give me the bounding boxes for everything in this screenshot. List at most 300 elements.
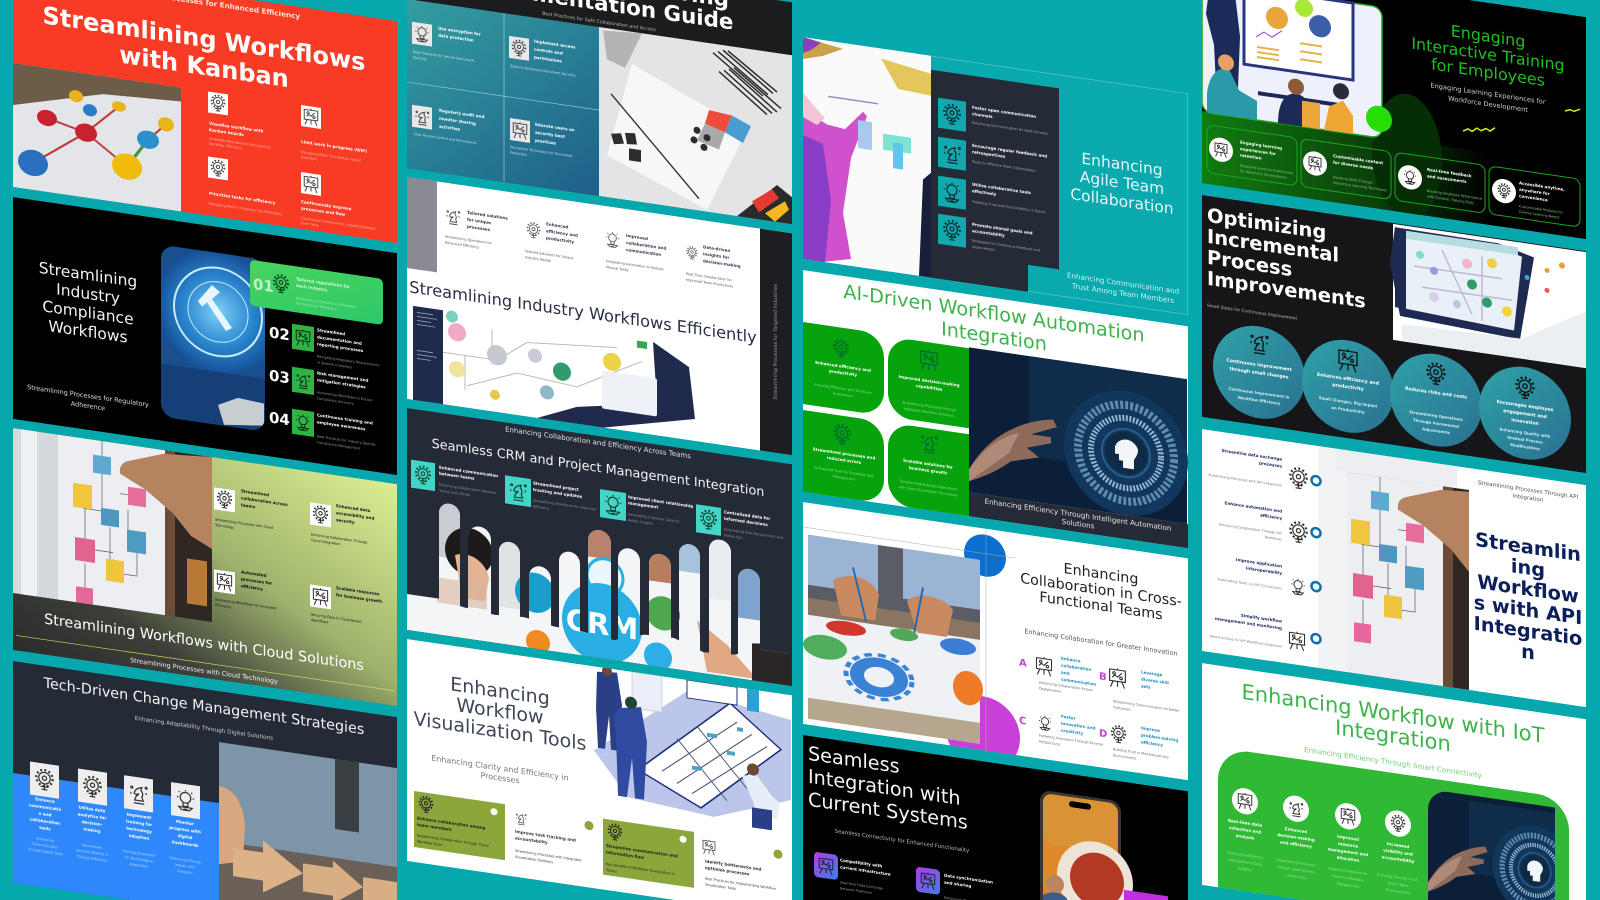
column 2: making: [84, 826, 101, 834]
tile 2: [888, 336, 969, 428]
card 3: Key Benefits of Workflow Visualization in: [606, 862, 675, 876]
card 3: and assessments: [1427, 173, 1467, 184]
item 04: [269, 405, 376, 453]
item 3: Better Insights: [628, 518, 653, 526]
squiggles: [1463, 92, 1580, 148]
card 4: Identify bottlenecks and: [705, 859, 761, 872]
item 2: Enhance automation and: [1225, 500, 1282, 514]
title: Industry: [56, 280, 120, 308]
cloud items: Enhancing Collaboration Through: [311, 533, 368, 545]
card 3: Teams: [605, 868, 617, 874]
item 2: [916, 866, 996, 900]
column 3: adoption: [129, 833, 149, 841]
kanban items: Over Time: [301, 221, 319, 228]
title: Streamlin: [1475, 528, 1581, 566]
item 3: Automating Tasks via API Connections: [1217, 577, 1282, 591]
panel: Document Sharing Implementation Guide: [407, 0, 792, 224]
item 2: [524, 218, 578, 267]
item: educate: Protection: [510, 151, 527, 157]
item B: sets: [1141, 683, 1151, 690]
column 3: [122, 775, 156, 870]
item A: collaboration: [1061, 663, 1091, 672]
item 2: [505, 475, 596, 518]
item 1: collection and: [1229, 825, 1261, 835]
column 1: n and: [39, 811, 52, 818]
item 3: [938, 176, 1046, 221]
item 2: Streamlining Processes: [1276, 858, 1316, 868]
card 2: [515, 810, 594, 870]
item 3: Generating Customer Data for: [628, 512, 679, 524]
kanban items: Continuously improve: [301, 199, 351, 211]
item 4: Promote shared goals and: [972, 222, 1033, 236]
card 01: 01: [253, 275, 274, 296]
column 4: progress with: [169, 825, 201, 834]
title: Integration: [941, 317, 1047, 356]
item 3: Improve application: [1236, 557, 1282, 569]
card 3: Streamline communication and: [606, 843, 678, 859]
subtitle: Enhancing Clarity and Efficiency in: [431, 754, 569, 783]
tile 1: [803, 322, 884, 416]
item: educate: [510, 118, 575, 164]
item B: diverse skill: [1141, 676, 1169, 685]
item 4: [938, 214, 1040, 259]
item 4: Follow-Ups: [724, 533, 742, 540]
kanban items: Kanban boards: [209, 127, 244, 137]
title column background: [1469, 468, 1586, 707]
card 4: Visualization Tools: [705, 883, 736, 891]
column 2: Data-Driven: [82, 843, 102, 850]
item: educate: Encryption Techniques for Document: [510, 145, 572, 158]
title: Process: [1207, 246, 1292, 281]
title: with Kanban: [119, 41, 289, 93]
tile 3: AI-Powered Tools for Seamless Task: [814, 466, 874, 478]
title: Enhancing: [1064, 561, 1138, 588]
item 4: decision-making: [703, 258, 741, 269]
photo: legal tech globe: [161, 246, 265, 430]
item 3: [600, 489, 693, 532]
column 4: [169, 782, 201, 876]
item 1: Enhancing Efficiency: [1227, 851, 1263, 860]
item 3: Improved: [1337, 834, 1359, 842]
card 2: Boosting Skills Through: [1333, 175, 1373, 185]
item: access controls: Implement access: [534, 39, 575, 50]
card 1: [414, 791, 505, 860]
item 2: efficiency: [1260, 512, 1282, 521]
item 4: Increased: [1387, 841, 1409, 849]
item 3: [606, 230, 666, 278]
circle 1: Continuous improvement: [1226, 359, 1292, 373]
item: encryption: Best Practices for Secure Document: [413, 50, 474, 63]
tile 3: Management: [833, 474, 856, 482]
title: Functional Teams: [1039, 590, 1163, 623]
photo: CRM arches: [407, 504, 791, 686]
item: audit: Regularly audit and: [439, 108, 484, 119]
column 4: Measuring Change: [169, 856, 201, 864]
subtitle: Streamlining Processes Through API: [1478, 480, 1578, 501]
tile 4: Transforming Business Operations: [899, 479, 957, 491]
item A: Enhancing Collaboration Across: [1039, 680, 1093, 692]
item B: B: [1099, 671, 1107, 683]
title: AI-Driven Workflow Automation: [843, 280, 1145, 347]
item 2: Efficiency: [533, 504, 549, 511]
item 3: Fostering Trust and Accountability in Teams: [972, 200, 1046, 214]
subtitle: Small Steps for Continuous Improvement: [1207, 303, 1298, 322]
cloud items: Securing Data in Cloud-Based: [311, 613, 361, 624]
item 2: Enhancing Collaboration Through API: [1219, 522, 1282, 536]
green lower band: [1202, 64, 1586, 244]
photo: team at whiteboard silhouette: [803, 37, 931, 278]
column 4: Impact with: [175, 863, 195, 870]
panel: Tech-Driven Change Management Strategies: [13, 661, 397, 900]
tile 3: Streamlined processes and: [813, 446, 875, 461]
item B: Outcomes: [1113, 705, 1130, 712]
item: access controls: Tools for Enhanced Document Security: [509, 64, 576, 78]
item A: Enhance: [1061, 656, 1080, 664]
title: for Employees: [1431, 55, 1545, 90]
tile 4: business growth: [909, 465, 947, 476]
caption band: Enhancing Efficiency Through Intelligent Automation: [985, 497, 1171, 533]
item 4: [1377, 808, 1419, 897]
cloud items: collaboration across: [241, 495, 288, 507]
item 2: and sharing: [944, 880, 971, 889]
column 3: Adaptation: [130, 862, 148, 869]
illustration: isometric planning board: [594, 664, 791, 833]
card 01: for Enhanced Efficiency: [296, 301, 336, 311]
subtitle: Enhancing Collaboration for Greater Innovation: [1024, 627, 1178, 658]
item 2: tracking and updates: [533, 487, 583, 499]
item 2: Streamlined project: [533, 480, 579, 492]
illustration: workflow map on device: [413, 305, 695, 441]
title: s with API: [1474, 591, 1582, 629]
title: Streamlining Workflows: [43, 1, 365, 76]
item 03: 03: [269, 366, 290, 387]
item 3: collaboration and: [626, 240, 666, 251]
item D: Building Trust in Multidisciplinary: [1113, 747, 1169, 759]
card 4: Diverse Learning Needs: [1519, 210, 1560, 220]
card 2: [1301, 138, 1391, 200]
title: Integratio: [1474, 612, 1582, 651]
item 2: through Smart Device: [1277, 865, 1315, 874]
card 3: [603, 819, 694, 888]
item C: [1019, 708, 1103, 753]
cloud items: accessibility and: [336, 510, 374, 521]
card 01: Tailored regulations for: [296, 276, 350, 289]
item 4: [1210, 608, 1320, 654]
column 2: decision-: [82, 819, 103, 827]
item D: D: [1099, 728, 1107, 740]
item 4: Environments: [1386, 888, 1410, 895]
decorative circles: [946, 529, 1020, 776]
item C: Foster: [1061, 714, 1076, 721]
cloud items: teams: [241, 502, 256, 509]
item: access controls: permissions: [534, 55, 562, 64]
title: Improvements: [1207, 267, 1366, 313]
card 1: for Workforce Development: [1240, 169, 1287, 180]
card 01: [250, 260, 383, 325]
circle 4: Encourages employee: [1497, 400, 1553, 413]
circle 4: engagement and: [1503, 408, 1547, 420]
column 4: digital: [178, 833, 193, 840]
item B: Leverage: [1141, 669, 1162, 677]
card 4: anywhere for: [1519, 187, 1551, 196]
tile 1: Automation: [833, 391, 853, 398]
item C: C: [1019, 716, 1026, 728]
column 2: Decision Making in: [76, 848, 108, 857]
panel: Enhancing Workflow with IoT Integration: [1202, 663, 1586, 900]
panel: Seamless Integration with Current Systems: [803, 735, 1188, 900]
item 4: accountability: [1382, 854, 1415, 864]
item 02: Navigating Regulatory Requirements: [317, 354, 379, 367]
item 3: allocation: [1337, 855, 1359, 863]
photo: kanban nodes board: [13, 63, 181, 212]
title: Streamlining Workflows with Cloud Solutions: [44, 612, 364, 674]
title: Optimizing: [1207, 204, 1326, 244]
panel: Streamlining Industry Workflows Efficiently: [407, 177, 792, 455]
item: encryption: [412, 22, 482, 69]
subtitle: Adherence: [71, 399, 105, 412]
card 1: Engaging Learning Experiences: [1240, 164, 1293, 175]
item 4: Centralized data for: [724, 509, 770, 521]
dark panel: [931, 70, 1059, 296]
item: encryption: data protection: [438, 33, 474, 43]
column 4: Analytics: [177, 869, 193, 875]
caption band: [969, 492, 1188, 548]
item C: creativity: [1061, 728, 1083, 736]
column 4: dashboards: [172, 839, 199, 848]
item 3: management: [628, 500, 658, 510]
kanban items: Understanding Kanban Principles for: [209, 137, 271, 150]
item 3: Proactive Workflow: [1332, 874, 1364, 883]
subtitle: Enhancing Adaptability Through Digital Solutions: [135, 716, 273, 742]
circle 3: Through Incremental: [1413, 417, 1460, 429]
subtitle: Best Practices for Safe Collaboration and Access: [542, 11, 656, 33]
title: Seamless: [808, 742, 900, 778]
item 4: insights for: [703, 251, 730, 260]
item: encryption: Use encryption for: [438, 26, 481, 37]
title: Tech-Driven Change Management Strategies: [43, 675, 364, 738]
panel: Streamlining Workflows with Kanban: [13, 0, 397, 243]
item: audit: [412, 104, 484, 146]
kanban items: Prioritize tasks for efficiency: [209, 191, 276, 205]
item 1: Between Platforms: [840, 886, 872, 895]
item 4: [696, 504, 783, 546]
column 1: collaboration: [30, 816, 60, 826]
item 1: between teams: [439, 471, 475, 481]
item 3: Improved: [626, 233, 648, 241]
subtitle: Enhancing Efficiency Through Smart Connectivity: [1304, 745, 1483, 780]
cloud items: for business growth: [336, 592, 382, 604]
item 1: [1227, 786, 1263, 874]
column 1: [26, 761, 63, 856]
subtitle: Trust Among Team Members: [1071, 281, 1174, 305]
item 1: [938, 98, 1048, 144]
photo: flat lay stationery: [599, 27, 792, 224]
circle 3: Streamlining Operations: [1409, 409, 1463, 422]
column 1: tools: [39, 825, 51, 832]
circle 3: Reduces risks and costs: [1405, 386, 1467, 401]
item 1: current infrastructure: [840, 864, 891, 877]
column 2: [76, 768, 108, 863]
item 04: employee awareness: [317, 419, 366, 432]
panel: Optimizing Incremental Process Improvements: [1202, 195, 1586, 473]
item 3: [1328, 800, 1368, 890]
item 1: Teams and Clients: [438, 489, 470, 497]
card 1: Enhance collaboration among: [417, 815, 485, 830]
item 3: Integrating Automation to Reduce: [606, 259, 664, 271]
subtitle: Streamlining Processes for Regulatory: [27, 383, 149, 409]
item 1: Compatibility with: [840, 857, 882, 869]
item 1: Real-time data: [1228, 818, 1262, 828]
column 3: Implement: [127, 812, 151, 820]
item 1: Insights: [1238, 866, 1252, 872]
item D: Environments: [1113, 753, 1137, 761]
phone mockup: [1040, 790, 1133, 900]
title: Enhancing Workflow with IoT: [1242, 679, 1544, 748]
column 1: communicatio: [29, 802, 61, 812]
item 4: informed decisions: [724, 516, 768, 527]
subtitle: Enhancing Communication and: [1067, 271, 1179, 296]
circle 4: Modifications: [1510, 442, 1540, 451]
title: Workflows: [48, 317, 128, 347]
card 4: Customizable Modules for: [1519, 204, 1563, 215]
title: Current Systems: [808, 788, 968, 834]
item A: Departments: [1039, 686, 1061, 694]
item 3: Predictive Analytics for: [1329, 866, 1367, 876]
card 01: each industry: [296, 283, 328, 292]
cloud items: security: [336, 517, 355, 525]
card 1: experiences for: [1240, 146, 1277, 156]
item: audit: monitor sharing: [439, 116, 476, 126]
card 3: with Dynamic Training Tools: [1427, 194, 1474, 205]
tile 1: Ensuring Efficiency with AI-Driven: [814, 383, 872, 395]
card 3: [1395, 152, 1485, 213]
photo: wooden arrows: [219, 742, 397, 900]
card 1: retention: [1240, 153, 1262, 161]
title: n: [1521, 640, 1535, 665]
column 3: training for: [126, 818, 153, 827]
title: Agile Team: [1080, 168, 1164, 198]
item 04: 04: [269, 408, 290, 429]
green panel: [1218, 747, 1569, 900]
item D: Improve: [1141, 725, 1160, 733]
item 4: management and monitoring: [1215, 616, 1282, 631]
card 2: Customizable content: [1333, 153, 1383, 165]
item 4: Best Practices for API Workflow Integration: [1210, 634, 1282, 649]
item A: A: [1019, 658, 1027, 670]
title: Collaboration: [1070, 185, 1174, 218]
item 02: in Specific Industries: [317, 360, 352, 370]
caption band: Solutions: [1062, 517, 1095, 531]
cloud items: [214, 484, 382, 632]
tile 4: with Smart Automation Techniques: [898, 485, 958, 498]
subtitle: Engaging Learning Experiences for: [1430, 81, 1546, 106]
item 1: Enhanced Efficiency: [445, 241, 479, 250]
tile 3: [803, 410, 884, 504]
item 04: Best Practices for Industry-Specific: [317, 434, 376, 447]
column 2: analytics for: [78, 811, 107, 821]
panel: Streamlining Workflows with API Integration: [1202, 429, 1586, 722]
dark side strip with vertical text: [760, 229, 792, 455]
item 02: documentation and: [317, 334, 362, 346]
column 3: for Technological: [125, 855, 153, 863]
circle 2: Small Changes, Big Impact: [1319, 395, 1377, 409]
circle 4: Gradual Process: [1507, 435, 1543, 445]
title: Streamlining: [39, 259, 137, 291]
title: Integration: [1335, 715, 1451, 756]
card 01: Streamlining Compliance Processes: [296, 296, 356, 309]
card 2: for diverse needs: [1333, 160, 1374, 171]
cloud items: efficiency: [241, 583, 263, 592]
item A: and: [1061, 670, 1070, 676]
photo: AI hand and head: [1428, 789, 1577, 900]
column 2: Change Initiatives: [77, 854, 108, 863]
item 1: [1208, 446, 1320, 493]
dark side strip with vertical text: Streamlining Processes for Targeted Industries: [773, 283, 779, 400]
title: Seamless CRM and Project Management Integration: [432, 437, 764, 500]
circle 2: productivity: [1332, 382, 1364, 393]
card 3: Boosting Employee Performance: [1427, 189, 1482, 201]
item 4: Strategies for Continuous Feedback and: [972, 239, 1040, 253]
item 4: Improved Team Productivity: [686, 278, 733, 289]
item B: [1099, 663, 1180, 719]
item 1: Streamline data exchange: [1221, 448, 1282, 462]
cloud items: Cloud Integration: [311, 538, 340, 546]
title: Enhancing: [450, 672, 550, 710]
item 1: [411, 460, 498, 501]
card 1: [1207, 125, 1297, 186]
item 3: communication: [626, 247, 661, 257]
kanban items: Managing Work: The Kanban Board: [301, 150, 361, 163]
tile 4: Scalable solutions for: [903, 458, 953, 470]
item 02: reporting processes: [317, 341, 364, 353]
card 2: accountability: [515, 835, 548, 845]
item 3: effectively: [972, 188, 996, 197]
panel: Enhancing Collaboration in Cross-Functional Teams: [803, 502, 1188, 800]
cloud items: Streamlining Processes with Cloud: [215, 518, 273, 530]
item 2: Workflows: [1265, 535, 1282, 542]
teal grid background: [407, 0, 599, 196]
subtitle: Enhancing Collaboration and Efficiency Across Teams: [505, 424, 691, 460]
subtitle: Integration: [1513, 493, 1544, 504]
item 4: Driven Work: [1388, 881, 1408, 888]
item 3: interoperability: [1246, 565, 1282, 576]
subtitle: Processes: [481, 771, 519, 785]
circle 1: [1213, 320, 1305, 425]
card 1: Engaging learning: [1240, 140, 1282, 151]
cloud items: Workflows: [311, 618, 329, 625]
item 02: [269, 320, 380, 374]
cloud items: Automated: [241, 569, 267, 578]
column 3: technology: [126, 826, 152, 834]
kanban items: [208, 91, 375, 236]
photo: flowchart sticky notes: [1318, 446, 1469, 690]
kanban items: Continuous Improvement: Adapting Kanban: [301, 216, 375, 231]
item 03: [269, 363, 372, 408]
item 1: Enhancing Collaboration Between: [439, 483, 496, 495]
title: Collaboration in Cross-: [1020, 571, 1182, 610]
blue band: [13, 773, 219, 900]
title: Streamlining Industry Workflows Efficiently: [409, 277, 757, 347]
item 2: productivity: [546, 235, 574, 244]
circle 2: on Productivity: [1331, 405, 1365, 415]
illustration: monitor with process map: [1390, 223, 1586, 368]
item: access controls: [509, 35, 576, 78]
item 02: Streamlined: [317, 327, 345, 336]
title: ing: [1511, 554, 1545, 582]
kanban items: Limit work in progress (WIP): [301, 139, 367, 154]
cloud items: processes for: [241, 576, 273, 586]
card 2: Improve task tracking and: [515, 829, 576, 843]
